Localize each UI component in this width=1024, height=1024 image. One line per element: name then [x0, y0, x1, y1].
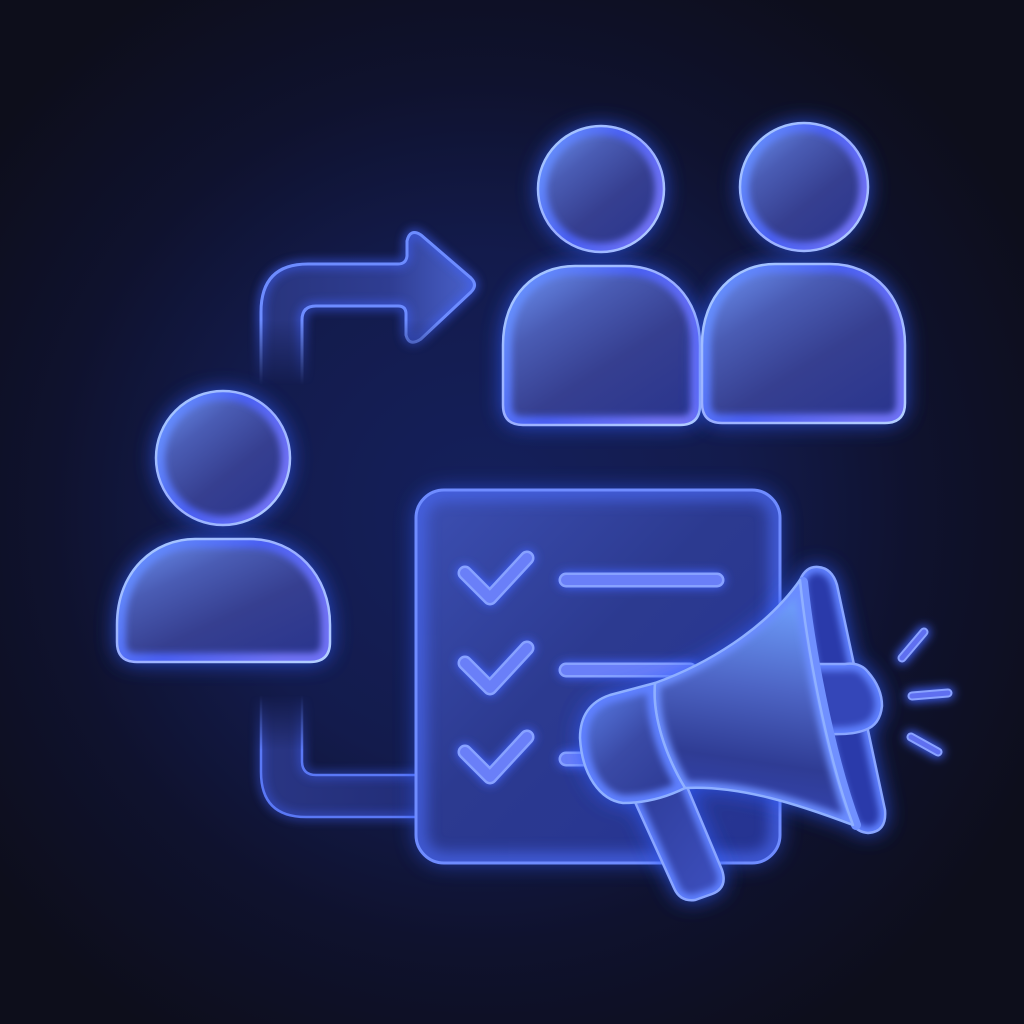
arrow: top connector [261, 233, 474, 400]
icon: megaphone [580, 567, 885, 900]
check row 2 [465, 648, 690, 688]
check row 3 [465, 737, 610, 777]
cone [655, 580, 856, 825]
rear cap [820, 662, 884, 736]
arrow: bottom connector [261, 680, 420, 817]
person: top right [702, 123, 905, 423]
bell back [800, 567, 885, 833]
body [117, 539, 330, 662]
body [503, 266, 700, 425]
head [156, 391, 290, 525]
panel: checklist [416, 490, 780, 863]
head [538, 126, 664, 252]
handle [634, 789, 725, 902]
check row 1 [465, 558, 717, 598]
person: left [117, 391, 330, 662]
megaphone glow [580, 567, 885, 900]
mouthpiece [580, 683, 685, 803]
body [702, 264, 905, 423]
person: top middle [503, 126, 700, 425]
head [740, 123, 868, 251]
icon: sound lines [902, 632, 948, 752]
